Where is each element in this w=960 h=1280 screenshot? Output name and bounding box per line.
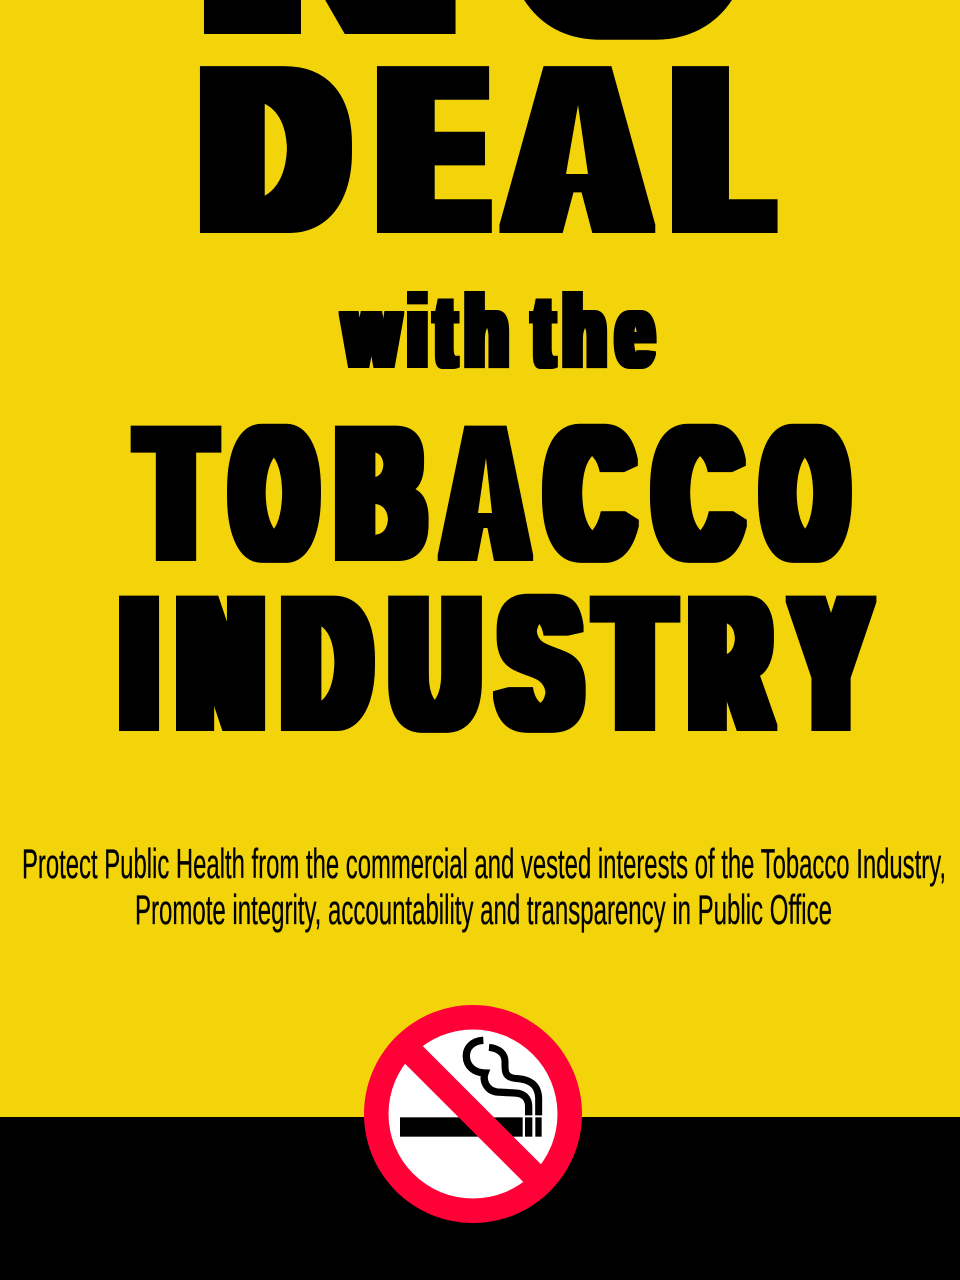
counter of the A in TOBACCO — [478, 458, 492, 513]
counter of the A in DEAL — [566, 105, 588, 174]
heading: with the: e — [616, 274, 653, 388]
heading: TOBACCO: T — [141, 388, 211, 598]
heading: TOBACCO: C — [549, 388, 630, 598]
heading: with the: h — [465, 274, 508, 388]
heading: TOBACCO: O — [235, 388, 313, 598]
heading: INDUSTRY: I — [124, 558, 154, 768]
heading: with the: t — [436, 274, 455, 388]
heading: INDUSTRY: Y — [796, 558, 866, 768]
heading: INDUSTRY: T — [600, 558, 670, 768]
heading: with the: w — [344, 274, 399, 388]
black footer band — [0, 1117, 960, 1280]
heading: TOBACCO: C — [657, 388, 738, 598]
heading: DEAL: L — [682, 20, 763, 278]
heading: INDUSTRY: D — [285, 558, 368, 768]
heading: INDUSTRY: S — [502, 558, 578, 768]
heading: TOBACCO: B — [339, 388, 422, 598]
heading: INDUSTRY: N — [181, 558, 261, 768]
heading: with the: i — [408, 274, 427, 388]
heading: with the: t — [534, 274, 553, 388]
text block: message — [22, 840, 946, 933]
heading: INDUSTRY: R — [693, 558, 768, 768]
heading: DEAL: D — [206, 20, 341, 278]
icon: no smoking sign — [364, 1005, 582, 1223]
heading: TOBACCO: A — [447, 388, 524, 598]
heading: with the: h — [563, 274, 606, 388]
heading: DEAL: A — [514, 20, 641, 278]
heading: TOBACCO: O — [766, 388, 844, 598]
heading: DEAL: E — [387, 20, 478, 278]
heading: INDUSTRY: U — [393, 558, 477, 768]
